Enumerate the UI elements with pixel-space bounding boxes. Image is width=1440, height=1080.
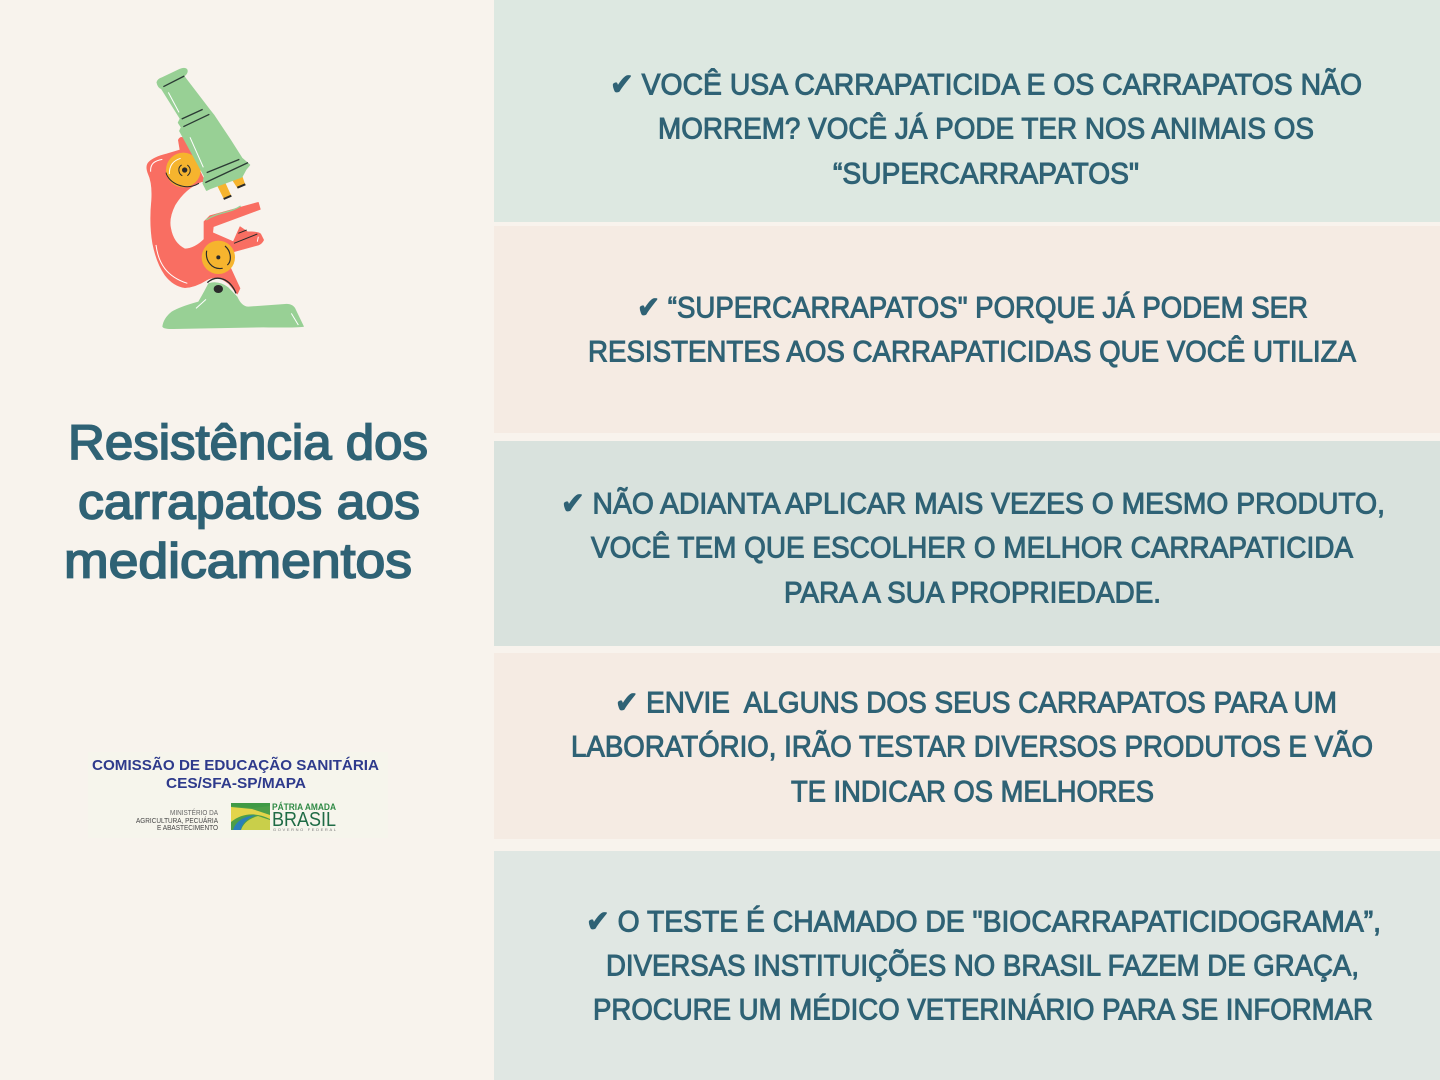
title (64, 416, 428, 589)
title: Resistência dos (68, 416, 428, 470)
brand text: GOVERNO FEDERAL (273, 827, 337, 832)
icon: microscope tube (157, 69, 249, 190)
logo heading: COMISSÃO DE EDUCAÇÃO SANITÁRIA (92, 756, 379, 774)
brand text: PÁTRIA AMADA (272, 802, 336, 812)
panel 3: choose the best product: PARA A SUA PROPRIEDADE. (784, 576, 1161, 610)
icon: objective lenses (217, 174, 245, 199)
brand text: BRASIL (272, 809, 336, 831)
logo heading (92, 756, 379, 792)
ministry text: E ABASTECIMENTO (157, 823, 218, 832)
panel 3: choose the best product: ✔ NÃO ADIANTA APLICAR MAIS VEZES O MESMO PRODUTO, (561, 486, 1385, 520)
panel 4: send to laboratory: LABORATÓRIO, IRÃO TESTAR DIVERSOS PRODUTOS E VÃO (571, 730, 1373, 764)
panel 1: supercarrapatos: “SUPERCARRAPATOS" (833, 158, 1139, 190)
logo heading: CES/SFA-SP/MAPA (166, 775, 306, 792)
ministry text: AGRICULTURA, PECUÁRIA (136, 816, 218, 825)
icon: upper knob (166, 153, 201, 187)
ministry text (136, 808, 218, 832)
title: medicamentos (64, 535, 412, 589)
brand text (272, 802, 337, 832)
panel 5: biocarrapaticidograma (494, 851, 1440, 1080)
panel 1: supercarrapatos: MORREM? VOCÊ JÁ PODE TER NOS ANIMAIS OS (658, 112, 1314, 146)
panel 2: resistance: ✔ “SUPERCARRAPATOS" PORQUE JÁ PODEM SER (637, 292, 1308, 324)
icon: Brazil flag emblem (231, 803, 270, 830)
panel 5: biocarrapaticidograma: DIVERSAS INSTITUIÇÕES NO BRASIL FAZEM DE GRAÇA, (606, 948, 1359, 982)
icon: microscope base (162, 278, 304, 329)
panel 5: biocarrapaticidograma: PROCURE UM MÉDICO VETERINÁRIO PARA SE INFORMAR (593, 994, 1373, 1026)
panel 1: supercarrapatos (494, 0, 1440, 222)
panel 5: biocarrapaticidograma: ✔ O TESTE É CHAMADO DE "BIOCARRAPATICIDOGRAMA”, (586, 906, 1381, 938)
title: carrapatos aos (78, 476, 420, 530)
panel 4: send to laboratory (494, 653, 1440, 839)
panel 4: send to laboratory: ✔ ENVIE ALGUNS DOS SEUS CARRAPATOS PARA UM (615, 686, 1337, 720)
ministry text: MINISTÉRIO DA (170, 808, 218, 817)
panel 1: supercarrapatos: ✔ VOCÊ USA CARRAPATICIDA E OS CARRAPATOS NÃO (610, 68, 1362, 102)
panel 2: resistance: RESISTENTES AOS CARRAPATICIDAS QUE VOCÊ UTILIZA (588, 336, 1356, 368)
icon: lower knob (202, 241, 235, 274)
panel 3: choose the best product (494, 441, 1440, 646)
panel 3: choose the best product: VOCÊ TEM QUE ESCOLHER O MELHOR CARRAPATICIDA (591, 532, 1353, 564)
panel 2: resistance (494, 226, 1440, 433)
panel 4: send to laboratory: TE INDICAR OS MELHORES (791, 776, 1154, 808)
icon: microscope (147, 69, 304, 329)
logo block: commission and government (88, 752, 388, 838)
